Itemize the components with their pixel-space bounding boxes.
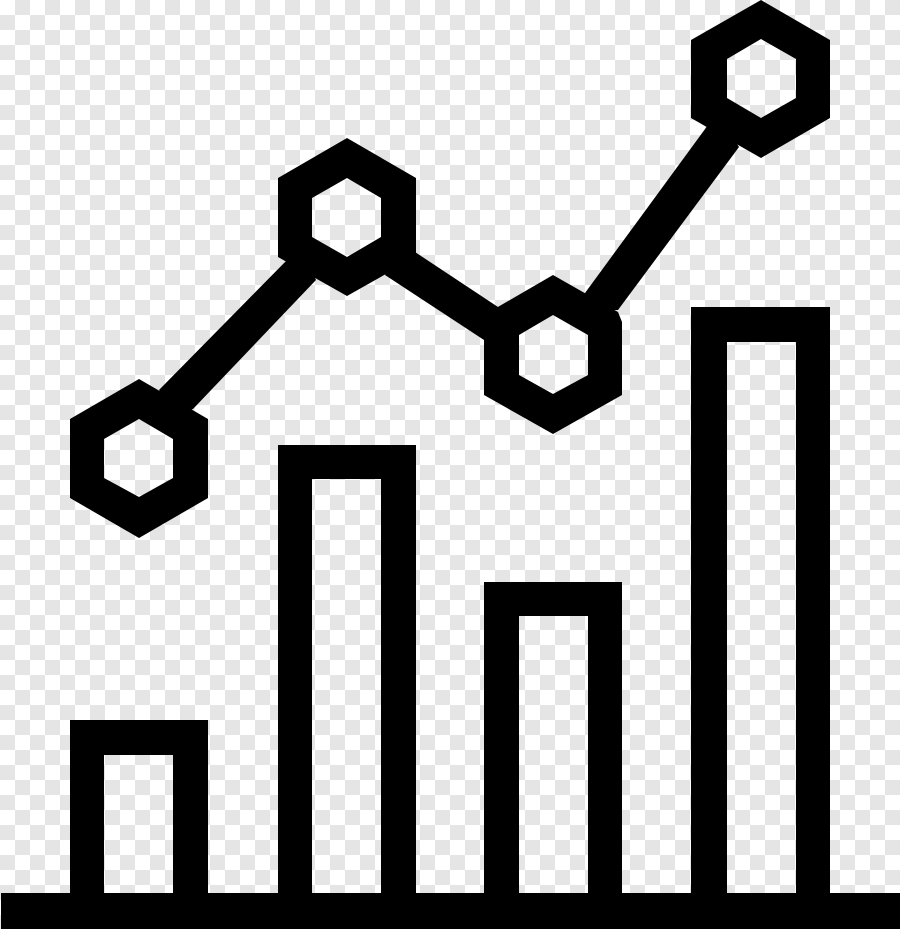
data point hexagon 4 — [691, 0, 830, 158]
data point hexagon 1 — [70, 379, 208, 538]
data point hexagon 3 — [484, 275, 622, 434]
trend line connecting the hexagons — [159, 125, 739, 415]
bar 4 — [691, 307, 830, 895]
bar 2 — [278, 445, 416, 895]
bar 1 — [70, 720, 208, 895]
baseline axis — [1, 893, 900, 929]
bar 3 — [484, 582, 622, 895]
data point hexagon 2 — [278, 138, 416, 296]
